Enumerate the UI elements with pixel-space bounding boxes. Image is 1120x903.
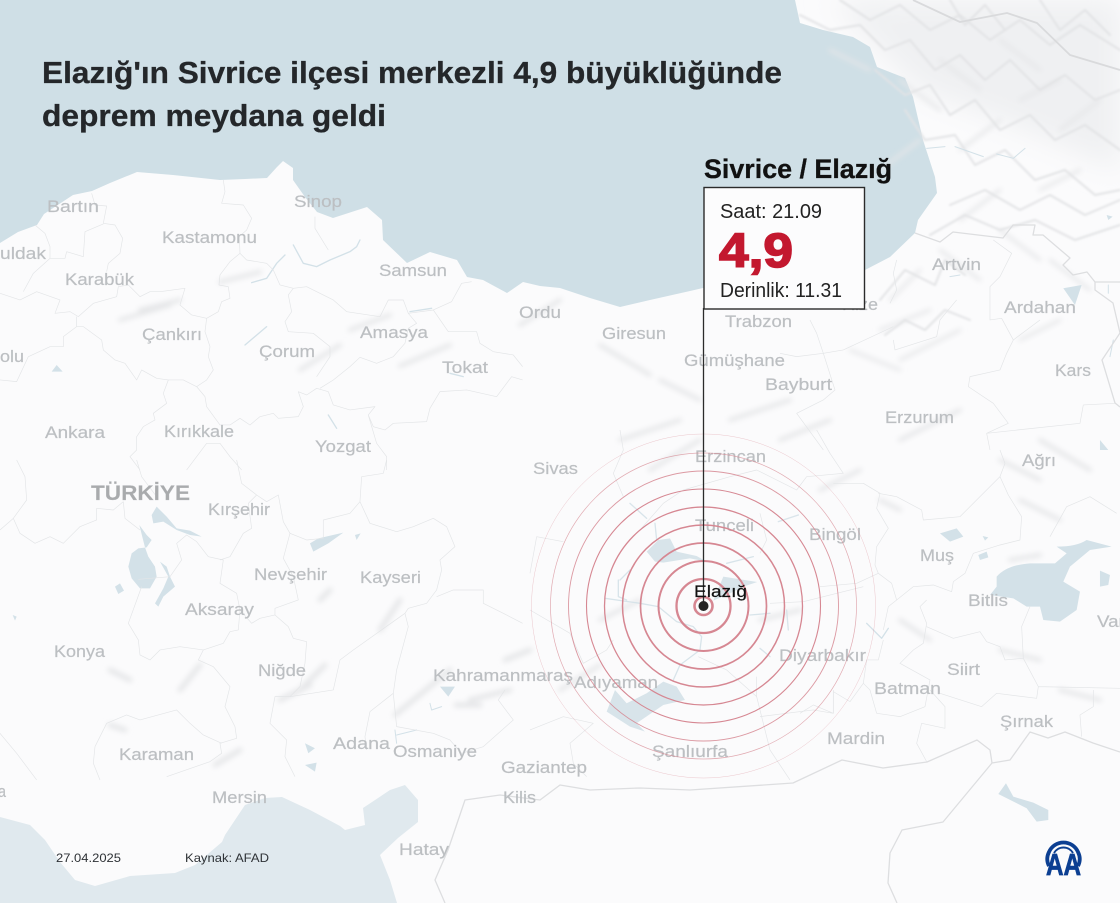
label: Karabük: Karabük: [65, 270, 135, 289]
label: Kayseri: Kayseri: [360, 568, 421, 587]
title: deprem meydana geldi: [42, 98, 386, 133]
label: Ardahan: Ardahan: [1004, 298, 1076, 317]
label: Kırıkkale: Kırıkkale: [164, 422, 234, 441]
Lake Van: [867, 528, 1112, 822]
label: Türkiye: TÜRKİYE: [91, 480, 190, 505]
seismic wave rings: [532, 434, 876, 778]
borders: around the epicentre: [530, 430, 863, 780]
province borders: [0, 180, 1120, 780]
borders: north: [0, 180, 523, 470]
epicentre dot: [698, 601, 708, 611]
label: Osmaniye: Osmaniye: [393, 742, 477, 761]
label: Amasya: Amasya: [360, 323, 429, 342]
callout heading: Sivrice / Elazığ: [704, 154, 892, 184]
label: Erzurum: Erzurum: [885, 408, 954, 427]
callout panel: [704, 188, 864, 309]
Black Sea region reservoirs: [52, 240, 463, 428]
leader line from callout to epicentre: [702, 308, 704, 606]
label: Bitlis: Bitlis: [968, 591, 1008, 610]
label: Hatay: Hatay: [399, 840, 450, 859]
label: Mardin: Mardin: [827, 729, 885, 748]
label: Trabzon: Trabzon: [725, 312, 792, 331]
label: Kars: Kars: [1055, 361, 1091, 380]
label: Diyarbakır: Diyarbakır: [779, 646, 866, 665]
border: Georgia and Armenia: [915, 225, 1120, 407]
border: Syria and Iraq: [435, 732, 1120, 903]
label: Ankara: Ankara: [45, 423, 106, 442]
label: Erzincan: Erzincan: [695, 447, 766, 466]
label: Bolu: olu: [0, 347, 24, 366]
label: Şanlıurfa: Şanlıurfa: [652, 742, 729, 761]
label: Kırşehir: Kırşehir: [208, 500, 270, 519]
borders: central and south: [0, 460, 523, 780]
label: Bayburt: Bayburt: [765, 375, 832, 394]
label: Yozgat: Yozgat: [315, 437, 371, 456]
logo: Anadolu Agency: AA: [1046, 847, 1081, 882]
label: Nevşehir: Nevşehir: [254, 565, 327, 584]
Caucasus ridges: [800, 0, 1120, 335]
international borders: [435, 0, 1120, 903]
label: Karaman: Karaman: [119, 745, 194, 764]
Caucasus relief wash: [830, 0, 1120, 170]
time: Saat: 21.09: [720, 201, 822, 223]
magnitude: 4,9: [719, 225, 793, 278]
label: Konya: Konya: [54, 642, 106, 661]
Kars and Artvin lakes: [927, 147, 1113, 450]
label: Ağrı: Ağrı: [1022, 451, 1056, 470]
label: Mersin: Mersin: [212, 788, 267, 807]
label: Samsun: Samsun: [379, 261, 447, 280]
label: Giresun: Giresun: [602, 324, 666, 343]
Mediterranean Sea: [0, 785, 418, 903]
label: Tunceli: Tunceli: [695, 516, 754, 535]
title: [42, 55, 782, 133]
label: Muş: Muş: [920, 546, 954, 565]
label: Tokat: Tokat: [442, 358, 488, 377]
label: Bartın: Bartın: [47, 197, 99, 216]
Black Sea: [0, 0, 937, 307]
depth: Derinlik: 11.31: [720, 280, 842, 302]
source: Kaynak: AFAD: [185, 851, 269, 865]
label: Batman: Batman: [874, 679, 941, 698]
label: Artvin: Artvin: [932, 255, 981, 274]
label: Çankırı: Çankırı: [142, 325, 202, 344]
title: Elazığ'ın Sivrice ilçesi merkezli 4,9 büyüklüğünde: [42, 55, 782, 90]
Keban, Hazar, Karakaya and Atatürk reservoirs: [605, 503, 798, 732]
label: Kastamonu: Kastamonu: [162, 228, 257, 247]
label: Gaziantep: Gaziantep: [501, 758, 587, 777]
label: Rize: Rize: [842, 295, 878, 314]
label: Niğde: Niğde: [258, 661, 306, 680]
label: Adıyaman: Adıyaman: [574, 673, 658, 692]
border: Russia: [913, 0, 1120, 70]
label: Kilis: Kilis: [503, 788, 536, 807]
borders: southeast: [800, 450, 1120, 762]
Central Anatolia lakes: Tuz and Hirfanlı: [13, 507, 455, 772]
province labels: [0, 192, 1120, 859]
label: Adana: Adana: [333, 734, 391, 753]
borders: northeast: [780, 240, 1115, 450]
hillshade relief: [110, 40, 1100, 765]
label: Siirt: Siirt: [947, 660, 980, 679]
label: Kahramanmaraş: Kahramanmaraş: [433, 666, 573, 685]
label: Gümüşhane: Gümüşhane: [684, 351, 785, 370]
label: Şırnak: Şırnak: [1000, 712, 1054, 731]
label: Elazığ epicentre: Elazığ: [694, 582, 747, 601]
label: Sinop: Sinop: [294, 192, 342, 211]
label: Aksaray: Aksaray: [185, 600, 255, 619]
label: Sivas: Sivas: [533, 459, 578, 478]
label: Zonguldak: uldak: [0, 244, 47, 263]
label: Çorum: Çorum: [259, 342, 315, 361]
date: 27.04.2025: [56, 851, 121, 865]
label: Ordu: Ordu: [519, 303, 561, 322]
lakes and rivers: [13, 147, 1113, 822]
label: Bingöl: Bingöl: [809, 525, 861, 544]
